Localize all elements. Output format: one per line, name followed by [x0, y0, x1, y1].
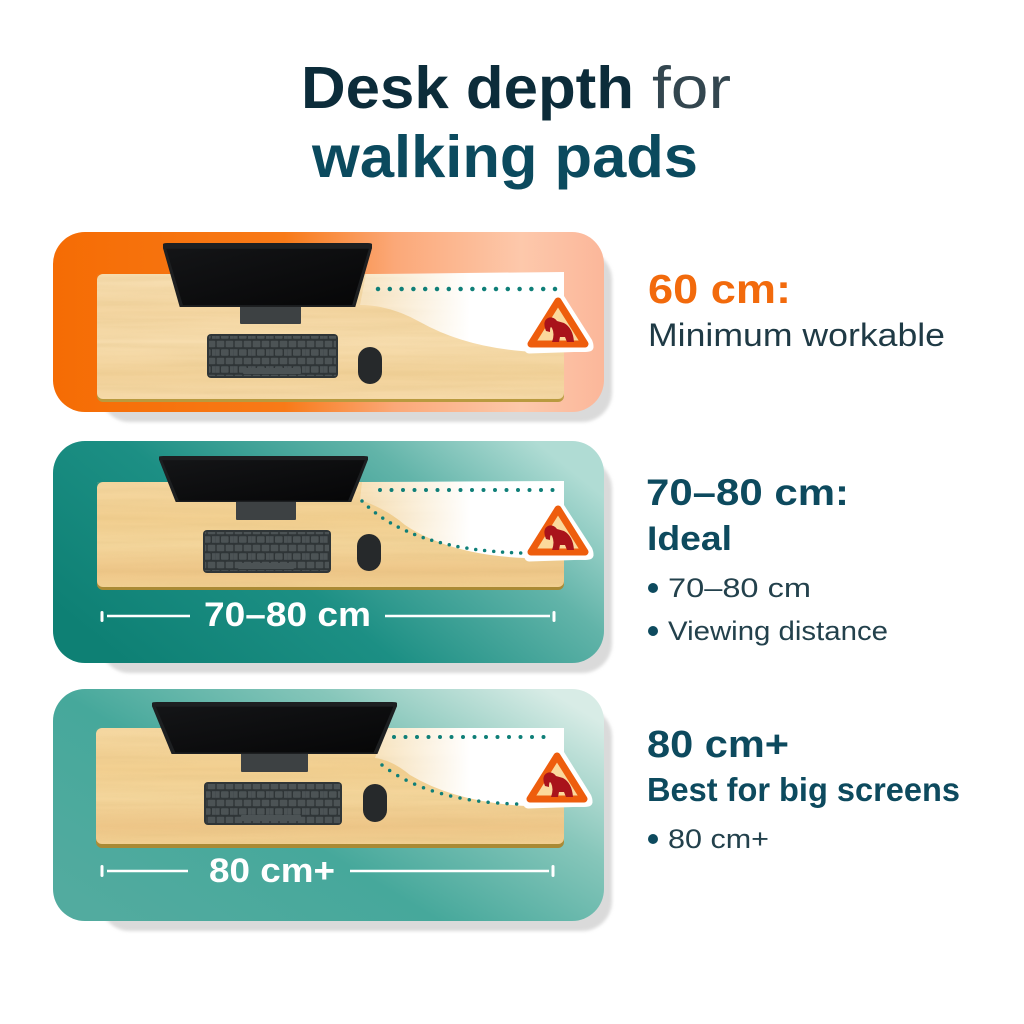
dimension: 70-80 cm: 70–80 cm — [204, 596, 371, 634]
title line two: walking pads — [311, 124, 698, 190]
text block: 60 cm: Minimum workable — [648, 317, 945, 353]
keyboard — [204, 782, 342, 825]
dimension: 80 cm+: 80 cm+ — [209, 852, 335, 890]
dimension: 70-80 cm — [100, 596, 556, 634]
text block: 80 cm+: 80 cm+ — [647, 724, 789, 766]
text block: 70-80 cm: Ideal — [647, 520, 732, 558]
viewing zone wedge — [360, 272, 593, 352]
viewing zone wedge — [375, 728, 592, 807]
text block: 80 cm+: Best for big screens — [647, 771, 960, 808]
monitor — [159, 456, 368, 520]
text block: 80 cm+ — [647, 724, 960, 854]
desk top — [96, 728, 564, 848]
title — [301, 55, 731, 190]
viewing zone wedge — [360, 481, 593, 560]
panel: 60 cm desk — [53, 232, 612, 422]
mouse — [363, 784, 387, 822]
dotted sight lines — [382, 737, 553, 804]
dotted sight lines — [362, 490, 556, 553]
warning sign — [528, 754, 588, 804]
desk top — [97, 274, 564, 402]
monitor — [152, 702, 397, 772]
monitor — [163, 243, 372, 324]
text block: 70-80 cm: 70–80 cm: — [646, 472, 849, 513]
warning sign — [529, 299, 589, 349]
warning sign — [529, 507, 589, 557]
dotted sight line — [378, 287, 556, 291]
text block: 70-80 cm: Viewing distance — [668, 616, 888, 646]
mouse — [357, 534, 381, 571]
mouse — [358, 347, 382, 384]
text block: 80 cm+: 80 cm+ — [668, 824, 769, 854]
keyboard — [203, 530, 331, 573]
keyboard — [207, 334, 338, 378]
panel: 80 cm+ desk — [53, 689, 612, 931]
dimension: 80 cm+ — [100, 852, 554, 890]
panel: 70-80 cm desk — [53, 441, 612, 673]
text block: 60 cm — [648, 266, 945, 353]
text block: 70-80 cm: 70–80 cm — [668, 573, 811, 603]
text block: 60 cm: 60 cm: — [648, 266, 791, 312]
title word: for: for — [652, 55, 731, 121]
text block: 70-80 cm — [646, 472, 888, 646]
desk top — [97, 482, 564, 590]
title line one: Desk depth — [301, 55, 634, 121]
